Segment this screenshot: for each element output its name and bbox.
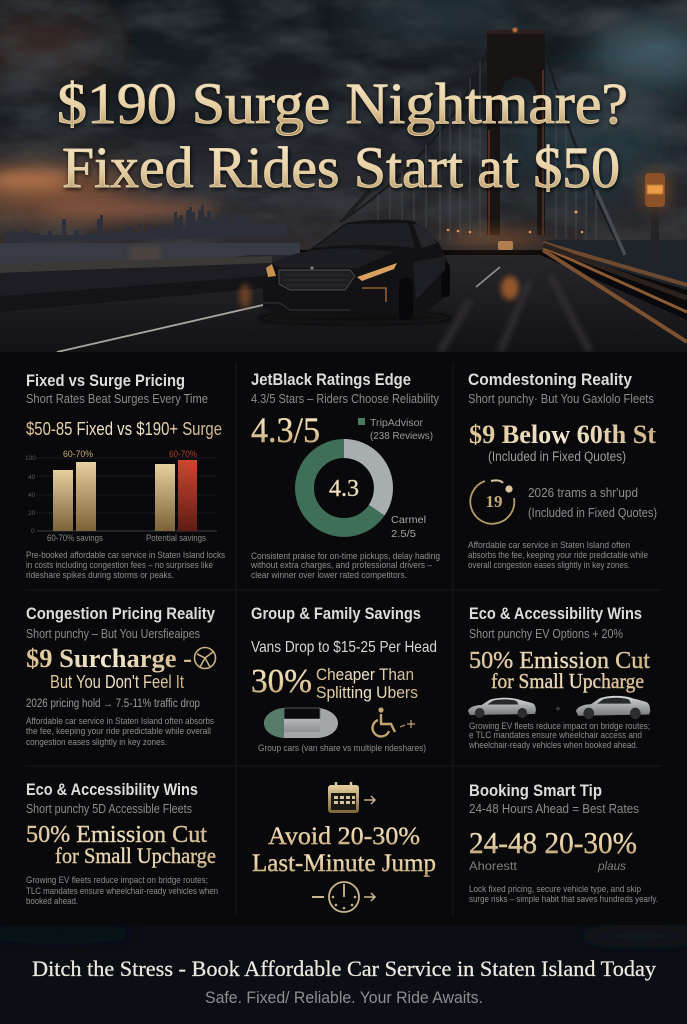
panel: group and family savings [251, 604, 437, 754]
panel: group and family savings: Vans Drop to $15-25 Per Head [251, 639, 437, 656]
panel: congestion reality: absorbs the fee, keeping your ride predictable while [468, 550, 648, 561]
sky with clouds [0, 0, 687, 250]
panel: group and family savings: Group & Family Savings [251, 604, 421, 623]
right copper railings [543, 243, 687, 342]
icon: gold ring with number [470, 480, 514, 524]
hero title [57, 71, 628, 200]
hero photo: stormy bridge scene [0, 0, 687, 352]
panel: eco and accessibility wins, upper [468, 604, 650, 751]
panel: booking smart tip [469, 781, 658, 905]
panel: congestion pricing reality: Affordable car service in Staten Island often absorbs [26, 716, 214, 727]
icon: calendar with arrow [328, 782, 375, 813]
legend: TripAdvisor [370, 417, 423, 429]
legend: (238 Reviews) [370, 430, 433, 442]
panel: avoid last-minute jump: Avoid 20-30% [268, 823, 420, 850]
icon: steering wheel [194, 648, 216, 668]
bar chart: 60-70% savings [47, 533, 103, 543]
panel grid lines [25, 362, 662, 915]
panel: congestion pricing reality: Short punchy – But You Uersfieaipes [26, 626, 200, 641]
icon: wheelchair [373, 707, 415, 736]
donut chart: 4.3 [329, 476, 359, 502]
panel: eco and accessibility wins, upper: e TLC mandates ensure wheelchair access and [469, 730, 642, 741]
panel: eco and accessibility wins, upper: Short punchy EV Options + 20% [469, 626, 623, 641]
panel: eco and accessibility wins, lower: 50% Emission Cut [26, 821, 207, 848]
panel: eco and accessibility wins, upper: for Small Upcharge [491, 669, 644, 693]
deck lights [445, 210, 583, 250]
panel: booking smart tip: plaus [597, 859, 626, 873]
panel: group and family savings: Cheaper Than [316, 665, 414, 684]
hero title: Fixed Rides Start at $50 [62, 135, 620, 200]
suspension cables [340, 48, 625, 255]
panel: congestion pricing reality: But You Don't Feel It [50, 672, 184, 692]
panel: fixed vs surge pricing: rideshare spikes during storms or peaks. [26, 570, 174, 581]
bar chart: 20 [28, 510, 36, 517]
icon: gold ring with number: 19 [486, 492, 502, 511]
panel: eco and accessibility wins, lower: Growing EV fleets reduce impact on bridge routes; [26, 875, 208, 886]
panel: eco and accessibility wins, upper: wheelchair-ready vehicles when booked ahead. [468, 740, 638, 751]
tagline: Safe. Fixed/ Reliable. Your Ride Awaits. [205, 988, 483, 1007]
panel: eco and accessibility wins, lower [26, 780, 218, 907]
panel: ratings edge: without extra charges, and professional drivers – [250, 560, 433, 571]
panel: congestion reality: $9 Below 60th St [469, 420, 656, 449]
panel: group and family savings: Splitting Ubers [316, 683, 418, 702]
bar chart: 60-70% [63, 449, 93, 459]
panel: group and family savings: 30% [251, 663, 312, 700]
icon: van from above [264, 708, 338, 738]
panel: booking smart tip: Ahorestt [469, 859, 518, 873]
panel: avoid last-minute jump [252, 782, 436, 912]
bar chart: 100 [25, 455, 36, 462]
panel: booking smart tip: Booking Smart Tip [469, 781, 602, 800]
panel: eco and accessibility wins, upper: 50% Emission Cut [469, 647, 650, 674]
panel: congestion pricing reality: Congestion Pricing Reality [26, 604, 215, 623]
panel: congestion reality: Comdestoning Reality [468, 370, 632, 389]
panel: congestion reality: (Included in Fixed Quotes) [528, 505, 657, 520]
panel: eco and accessibility wins, upper: Growing EV fleets reduce impact on bridge routes; [469, 721, 650, 732]
panel: eco and accessibility wins, lower: TLC mandates ensure wheelchair-ready vehicles when [26, 886, 218, 897]
panel: congestion reality [468, 370, 657, 571]
panel: congestion pricing reality: $9 Surcharge - [26, 644, 192, 673]
bar chart: 60-70% [169, 449, 197, 459]
panel: booking smart tip: Lock fixed pricing, secure vehicle type, and skip [469, 884, 641, 895]
panel: congestion pricing reality: the fee, keeping your ride predictable while overall [26, 726, 211, 737]
legend [358, 417, 433, 442]
panel: fixed vs surge pricing [25, 371, 225, 581]
bar chart [25, 449, 217, 543]
panel: eco and accessibility wins, lower: booked ahead. [26, 896, 78, 907]
bridge tower [487, 28, 545, 235]
right side landscape behind rail [545, 240, 687, 290]
panel: congestion reality: 2026 trams a shr'upd [528, 485, 638, 500]
panel: ratings edge [250, 370, 440, 581]
panel: ratings edge: 4.3/5 [251, 410, 320, 450]
panel: ratings edge: JetBlack Ratings Edge [251, 370, 411, 389]
panel: eco and accessibility wins, upper: Eco & Accessibility Wins [469, 604, 642, 623]
panel: congestion reality: Affordable car service in Staten Island often [468, 540, 630, 551]
panel: booking smart tip: 24-48 20-30% [469, 825, 637, 860]
panel: avoid last-minute jump: Last-Minute Jump [252, 850, 436, 877]
city skyline [5, 205, 287, 243]
panel: fixed vs surge pricing: Fixed vs Surge Pricing [26, 371, 185, 390]
black sedan [257, 220, 453, 324]
panel: fixed vs surge pricing: Short Rates Beat Surges Every Time [26, 391, 208, 406]
road markings and reflections [57, 267, 590, 352]
donut chart [304, 448, 384, 528]
bar chart: Potential savings [146, 533, 206, 543]
panel: congestion pricing reality: congestion eases slightly in key zones. [26, 737, 167, 748]
panel: ratings edge: clear winner over lower rated competitors. [251, 570, 407, 581]
icon: clock with arrows [312, 882, 375, 912]
hero title: $190 Surge Nightmare? [57, 71, 628, 136]
panel: ratings edge: 4.3/5 Stars – Riders Choose Reliability [251, 391, 439, 406]
bar chart: 0 [31, 528, 35, 535]
panel: fixed vs surge pricing: $50-85 Fixed vs $190+ Surge [26, 419, 222, 439]
panel: congestion reality: Short punchy· But You Gaxlolo Fleets [468, 391, 654, 406]
panel: fixed vs surge pricing: in costs including congestion fees – no surprises like [26, 560, 213, 571]
panel: fixed vs surge pricing: Pre-booked affordable car service in Staten Island locks [26, 550, 225, 561]
panel: ratings edge: Carmel [391, 514, 426, 526]
left guard rail [0, 256, 272, 312]
panel: eco and accessibility wins, upper: + [555, 704, 561, 714]
panel: booking smart tip: 24-48 Hours Ahead = Best Rates [469, 801, 639, 816]
footer banner [0, 925, 687, 1003]
panel: eco and accessibility wins, lower: for Small Upcharge [55, 843, 216, 868]
street lamp [640, 170, 670, 263]
bar chart: 40 [28, 492, 36, 499]
panel: congestion reality: (Included in Fixed Quotes) [488, 449, 626, 464]
bar chart: 40 [28, 474, 36, 481]
icon: silver car right [576, 696, 650, 719]
panel: eco and accessibility wins, lower: Short punchy 5D Accessible Fleets [26, 801, 192, 816]
panel: congestion pricing reality: 2026 pricing hold → 7.5-11% traffic drop [26, 698, 200, 710]
panel: congestion pricing reality [26, 604, 216, 748]
water [0, 243, 300, 264]
panel: ratings edge: 2.5/5 [391, 528, 416, 540]
panel: eco and accessibility wins, lower: Eco & Accessibility Wins [26, 780, 198, 799]
panel: congestion reality: overall congestion eases slightly in key zones. [468, 560, 630, 571]
panel: group and family savings: Group cars (van share vs multiple rideshares) [258, 743, 426, 754]
icon: silver car left [468, 698, 536, 718]
road surface [0, 255, 687, 352]
call to action: Ditch the Stress - Book Affordable Car Service in Staten Island Today [32, 956, 656, 981]
panel: ratings edge: Consistent praise for on-time pickups, delay hading [251, 551, 440, 562]
